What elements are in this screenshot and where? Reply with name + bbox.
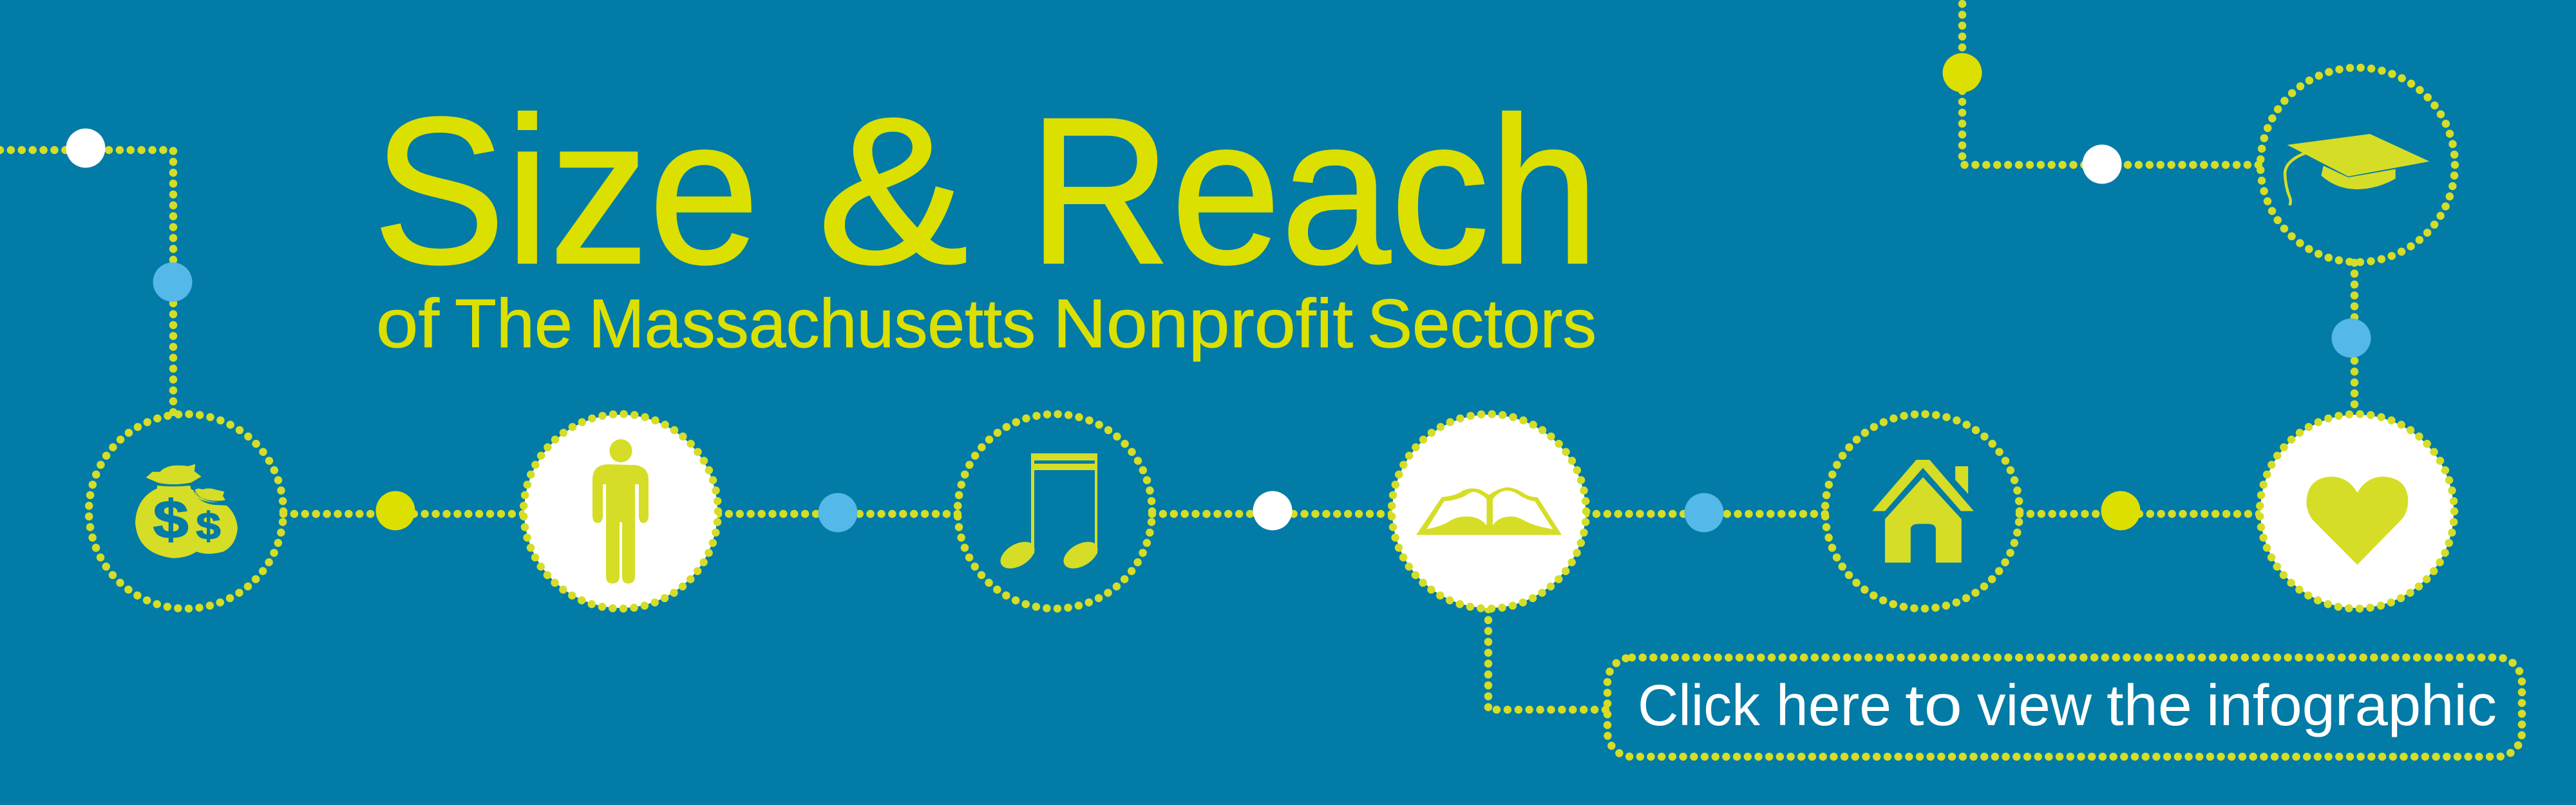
panel: music circle: [958, 414, 1152, 609]
icon: person: [592, 439, 649, 583]
node: blue left: [153, 263, 192, 301]
subtitle: The: [455, 285, 573, 362]
node: lime 1: [376, 491, 415, 531]
node: lime top right: [1942, 53, 1982, 93]
callout text: to: [1905, 674, 1962, 738]
subtitle: Sectors: [1367, 285, 1596, 362]
icon: music notes: [996, 453, 1103, 574]
callout text: Click: [1638, 674, 1761, 738]
panel: person circle: [524, 414, 718, 609]
callout text: view: [1977, 674, 2092, 738]
subtitle: [376, 285, 1596, 362]
subtitle: Massachusetts: [589, 285, 1036, 362]
title: Size: [373, 74, 759, 307]
title: Reach: [1028, 74, 1599, 307]
panel: house circle: [1825, 414, 2020, 609]
panel: book circle: [1392, 414, 1586, 609]
node: white top right: [2083, 144, 2121, 184]
icon: money bags: $: [153, 490, 189, 550]
icon: house: [1872, 460, 1974, 563]
node: white 3: [1253, 491, 1292, 531]
connector: top right line to graduation cap circle: [1962, 4, 2260, 165]
callout text: infographic: [2206, 674, 2497, 738]
icon: money bags: [135, 464, 238, 558]
callout text: the: [2107, 674, 2192, 738]
connector: row of dotted lines between circles: [283, 510, 2260, 518]
subtitle: Nonprofit: [1053, 285, 1353, 362]
connector: graduation cap circle to heart circle: [2351, 263, 2358, 413]
callout: click to view button: [1607, 658, 2522, 757]
icon: graduation cap: [2285, 134, 2430, 204]
callout text: [1638, 674, 2497, 738]
icon: open book: [1416, 488, 1562, 535]
title: [373, 74, 1599, 307]
connector: book circle to call to action: [1488, 609, 1607, 710]
title: &: [817, 74, 969, 307]
icon: money bags: $: [196, 505, 221, 547]
subtitle: of: [376, 285, 439, 362]
connector: top left line to money bag circle: [0, 150, 173, 412]
node: blue 4: [1685, 493, 1723, 532]
panel: money bags circle: [89, 414, 283, 609]
node: white top left: [66, 129, 106, 167]
node: lime 5: [2101, 491, 2141, 531]
panel: heart circle: [2260, 414, 2454, 609]
icon: heart: [2306, 477, 2408, 565]
node: blue right: [2331, 318, 2371, 358]
panel: graduation cap circle: [2260, 68, 2455, 262]
callout text: here: [1776, 674, 1891, 738]
node: blue 2: [818, 493, 858, 532]
